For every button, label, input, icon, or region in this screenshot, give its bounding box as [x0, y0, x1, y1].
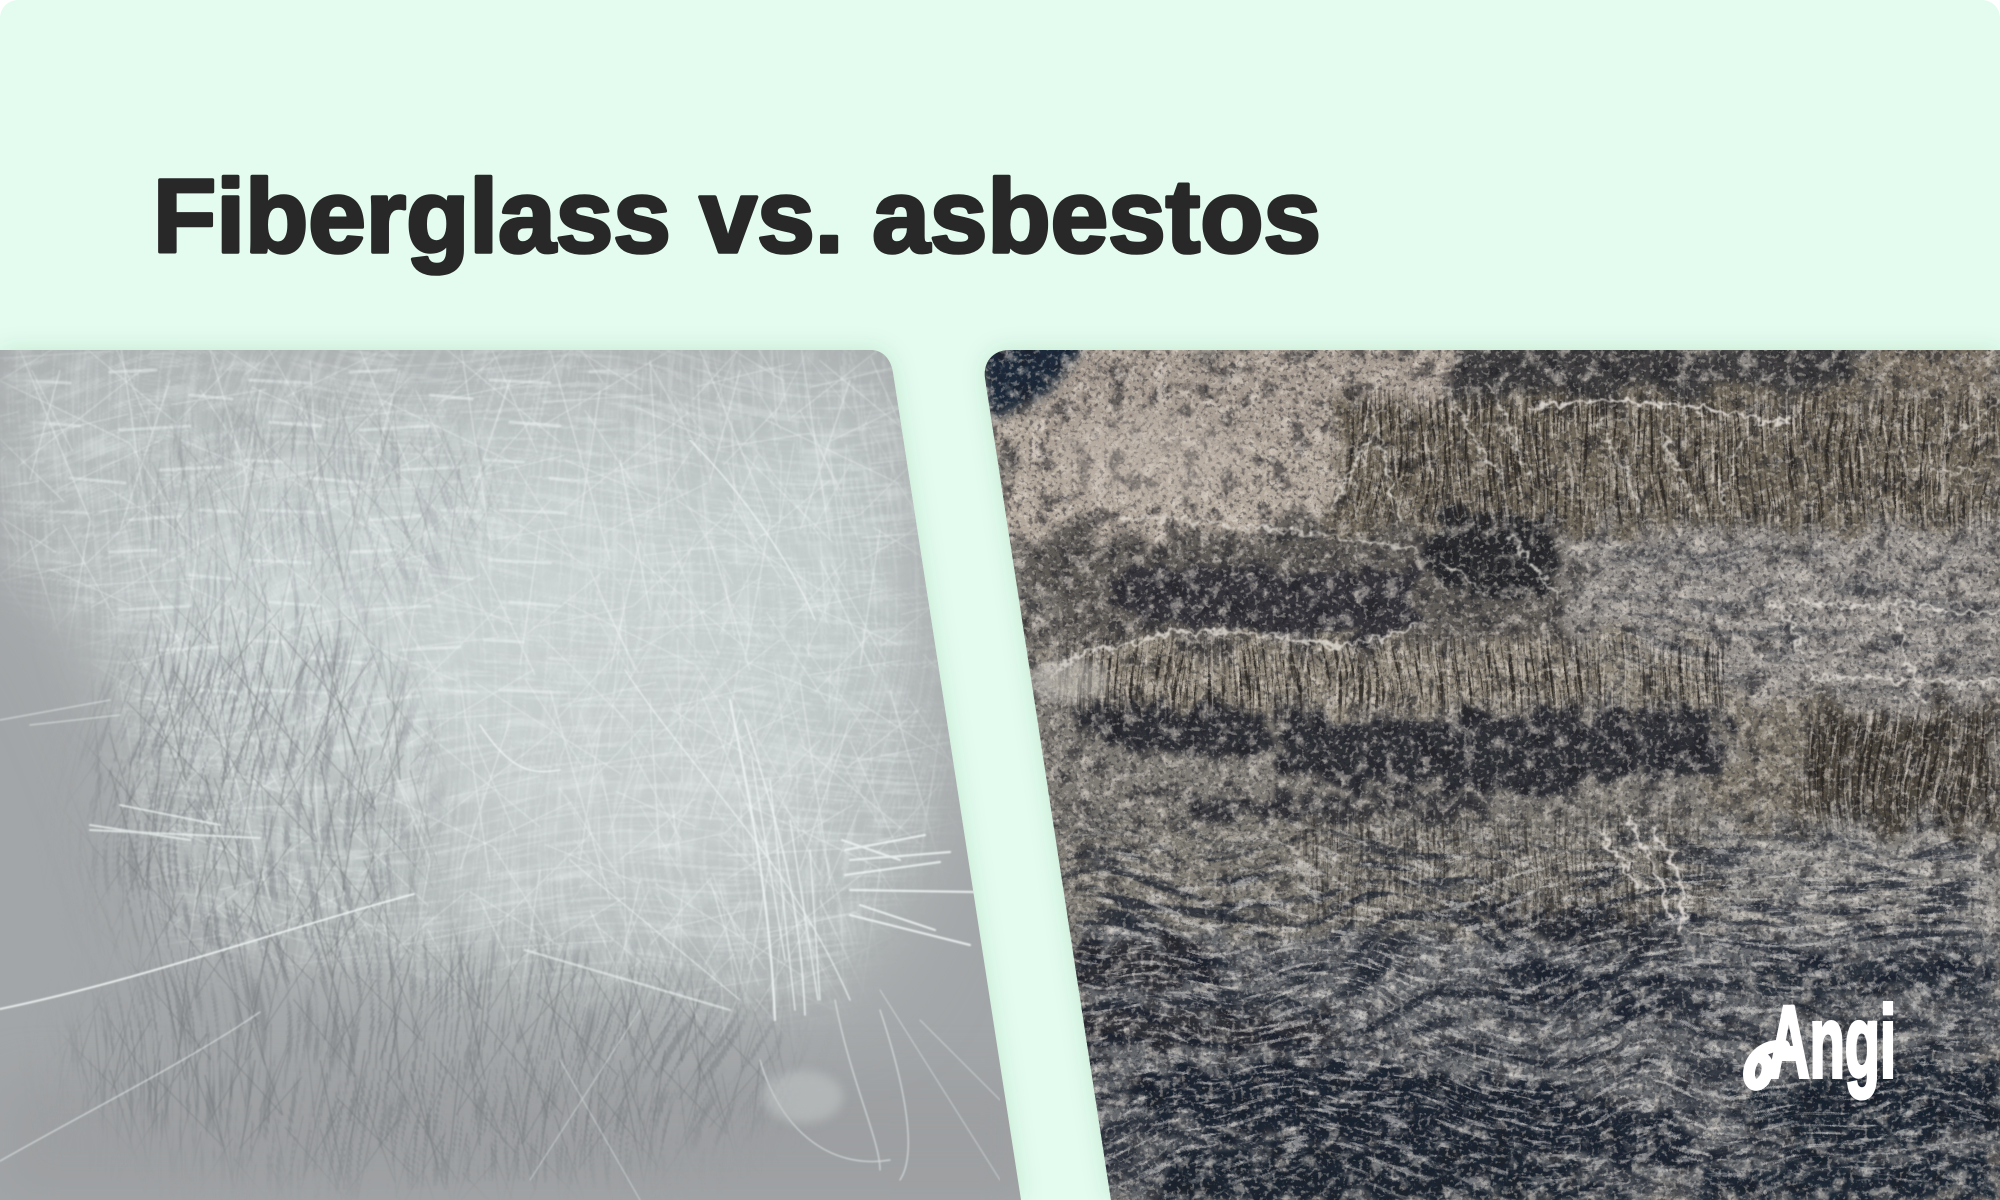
pale fibre veins: [1060, 380, 2000, 930]
blotchy rock texture: [980, 340, 2000, 1200]
dark bands: [1075, 502, 2000, 1200]
title: Fiberglass vs. asbestos: [153, 159, 1321, 275]
panel: asbestos photo: [980, 340, 2000, 1200]
dark sky corner: [980, 340, 1090, 420]
vertical asbestos fibres: [980, 340, 2000, 1200]
long stray fibres: [0, 440, 1000, 1200]
mottled texture: [980, 340, 2000, 1200]
light fibre mass: [0, 340, 950, 1000]
fibre hatching: [0, 350, 954, 1190]
logo: Angi: [1749, 985, 1896, 1099]
tonal layers: [1000, 340, 2000, 1200]
panel: fiberglass photo: [0, 340, 1040, 1200]
logo: Angi: Angi: [1768, 985, 1896, 1099]
horizontal rock strata: [980, 340, 2000, 1200]
fluff clump: [763, 1071, 843, 1123]
